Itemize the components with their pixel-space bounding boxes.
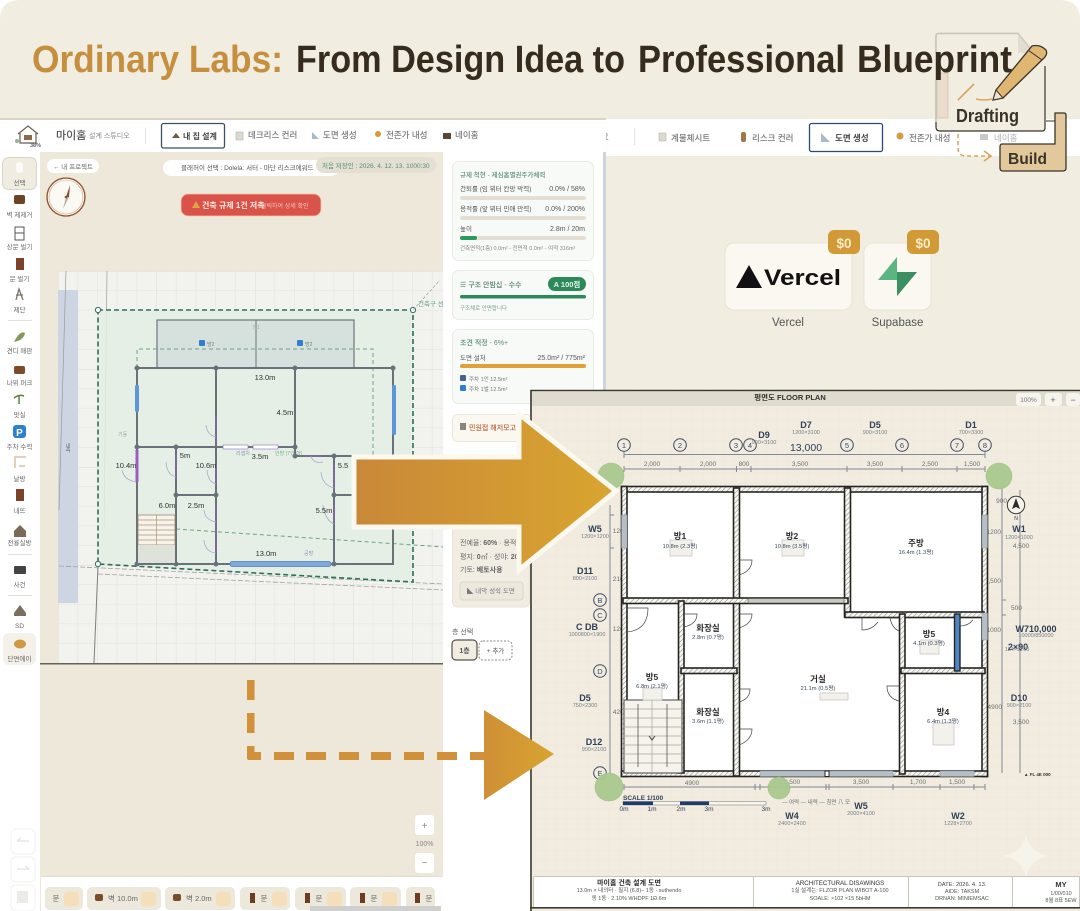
blueprint header <box>532 392 1080 406</box>
grid bubbles: 7 <box>955 441 959 450</box>
tray chip: door 2 <box>295 887 346 910</box>
title: From Design Idea to <box>296 39 625 81</box>
card: regulation: 0.0% / 200% <box>545 206 585 213</box>
card: Vercel <box>725 230 860 329</box>
icon: house logo <box>15 126 41 149</box>
opening tags: 1200 <box>987 529 1001 536</box>
card: building info: ◣ 내악 성쉭 도면 <box>467 586 515 595</box>
active tab: my house <box>162 124 224 148</box>
wall nodes <box>134 366 396 566</box>
opening tags: 10000/850000 <box>1018 633 1054 639</box>
dimension chains <box>610 442 1020 790</box>
garage block: 방2 <box>305 341 313 348</box>
floor plan windows <box>622 515 988 776</box>
panel: app top navigation: 데크리스 컨러 <box>248 130 297 140</box>
dimension labels: 10.4m <box>116 461 136 470</box>
opening tags: 4200 <box>613 709 628 716</box>
opening tags: 1228×2700 <box>944 821 972 827</box>
title block: 8월 8표 5EW <box>1045 896 1077 904</box>
opening tags: 2,500 <box>985 578 1001 585</box>
grid bubbles: C <box>597 611 603 620</box>
opening tags: 900 <box>996 498 1007 505</box>
landscaping trees <box>595 463 1012 801</box>
dimension labels: 5m <box>180 451 190 460</box>
panel: app top navigation: 마이홈 <box>56 128 86 142</box>
icon: drafting document: Drafting <box>956 106 1019 126</box>
room labels: 3.6m (1.1평) <box>692 717 724 725</box>
delete button <box>11 885 35 911</box>
title block: SOALE: ×102 ×15 5bHM <box>810 896 871 902</box>
tool: camera <box>14 566 26 589</box>
scale bar: 2m <box>676 806 686 813</box>
room labels: 방2 <box>786 531 799 541</box>
door swings <box>627 560 973 745</box>
scale bar: 1m <box>647 806 657 813</box>
icon: build tag with dashed arrow: Build <box>1008 151 1047 168</box>
card: Supabase <box>864 230 939 329</box>
scale bar: 3m <box>761 806 771 813</box>
tool: 3D: SD <box>15 623 24 630</box>
title: Ordinary Labs: <box>32 39 283 81</box>
card: regulation: 건축면적(1층) 0.0m² - 전면적 0.0m² - 여적 316m² <box>460 244 576 252</box>
dimension chains: 800 <box>739 461 750 468</box>
blueprint header: + <box>1050 395 1056 405</box>
floor plan walls <box>622 486 988 776</box>
room labels: 2.8m (0.7평) <box>692 633 724 641</box>
canvas zoom controls: 100% <box>416 841 433 848</box>
title block: 1실 설계는: FLZOR PLAN WIBOT A-100 <box>791 886 889 894</box>
opening tags: W4 <box>785 811 799 821</box>
card: regulation: 규제 척현 - 제심홈별권주가체력 <box>460 170 545 179</box>
tool: light: 날방 <box>14 474 25 483</box>
opening tags: D10 <box>1011 693 1027 703</box>
opening tags: 900×3100 <box>863 430 887 436</box>
tool: ladder <box>14 289 25 314</box>
panel: app top navigation: 도면 생성 <box>323 130 357 140</box>
stairs <box>138 515 175 563</box>
road strip: 내 <box>65 442 71 450</box>
card: Vercel: $0 <box>836 236 852 251</box>
card: conditions: 도면 설처 <box>460 353 486 362</box>
opening tags: 800×2100 <box>573 576 597 582</box>
floor selector: 층 선택 <box>452 627 473 636</box>
opening tags <box>569 420 1057 827</box>
tool: parking: P <box>16 428 23 439</box>
title block <box>530 876 1080 909</box>
card: conditions: 주차 1인 12.5m² <box>469 375 508 383</box>
title block: DRNAN: MINIEMSAC <box>935 896 989 902</box>
room labels: 6.8m (2.1평) <box>636 682 668 690</box>
card: conditions: 조견 적정 - 6%+ <box>460 338 508 347</box>
icon: north arrow: N <box>1014 516 1018 522</box>
tool: exterior (active) <box>3 633 36 665</box>
active tab: drawing generation: 도면 생성 <box>835 133 869 143</box>
grid bubbles: 6 <box>900 441 904 450</box>
tray chip: wall 2m: 벽 2.0m <box>186 893 212 903</box>
title <box>32 39 1012 81</box>
undo button <box>11 829 35 854</box>
dimension labels: 10.6m <box>196 461 216 470</box>
room labels: 10.8m (2.3평) <box>663 542 698 550</box>
site boundary dashed <box>98 310 413 582</box>
road strip <box>58 271 444 663</box>
active tab: drawing generation <box>810 124 882 152</box>
dimension chains: 3,500 <box>792 461 809 468</box>
tool: door: 문 벌기 <box>10 274 29 283</box>
title block: 마이홈 건축 설계 도면 <box>597 878 661 887</box>
tool: home settings <box>8 525 31 547</box>
panel: secondary nav bar: 계물체시트 <box>671 133 710 143</box>
opening tags: C DB <box>576 622 598 632</box>
dimension labels: 4.5m <box>277 408 293 417</box>
dimension chains: 3,500 <box>867 461 884 468</box>
panel: secondary nav bar: 네이홈 <box>994 133 1018 143</box>
grid bubbles: 5 <box>845 441 849 450</box>
card: conditions <box>452 330 594 404</box>
dimension chains: 1,500 <box>964 461 981 468</box>
tool: interior door: 내뜨 <box>14 506 25 515</box>
opening tags: D1 <box>965 420 977 430</box>
back button: ← 내 프로젝트 <box>53 162 93 171</box>
opening tags: 2×90 <box>1008 642 1028 652</box>
dimension labels: 13.0m <box>256 549 276 558</box>
opening tags: D5 <box>869 420 881 430</box>
icon: compass <box>47 178 85 216</box>
floor plan sketch on grid <box>58 271 444 663</box>
card: structure: ☰ 구조 안밤십 - 수수 <box>460 280 522 289</box>
dimension labels: 6.0m <box>159 501 175 510</box>
opening tags: 2100 <box>613 576 628 583</box>
tool: sprout: 맛실 <box>14 410 25 419</box>
opening tags: 900×2100 <box>1007 703 1031 709</box>
tool: sprout <box>14 395 25 419</box>
scale bar: 0m <box>619 806 629 813</box>
tool: select (active): 선택 <box>14 178 25 187</box>
opening tags: 500 <box>1011 605 1022 612</box>
tray chip: door 1 <box>240 887 290 910</box>
opening tags: 750×2300 <box>573 703 597 709</box>
opening tags: 700×3300 <box>959 430 983 436</box>
grid bubbles: 2 <box>678 441 682 450</box>
tray chip: wall 2m <box>165 887 235 910</box>
title block: DATE: 2026. 4. 13. <box>938 882 987 888</box>
grid bubbles: 8 <box>983 441 987 450</box>
scale bar: — 여력 — 내력 — 침면 八 모 <box>782 798 850 806</box>
tray chip: door <box>45 887 83 910</box>
title block: 1/00/010 <box>1050 891 1072 897</box>
icon: house logo: 38% <box>30 143 41 149</box>
dimension chains: 3,500 <box>853 779 870 786</box>
tool: window <box>7 227 32 251</box>
room labels: 4.1m (0.3평) <box>913 639 945 647</box>
tool: wall remove: 벽 제제거 <box>7 210 32 219</box>
opening tags: 4900 <box>988 704 1002 711</box>
canvas zoom controls <box>415 815 434 873</box>
tool: window: 상문 벌기 <box>7 242 32 251</box>
opening tags: D11 <box>577 566 593 576</box>
icon: build tag with dashed arrow <box>958 113 1066 171</box>
saved-time pill: 처음 저장인 : 2026. 4. 12. 13. 1000:30 <box>322 161 430 170</box>
title block: 13.0m × 내의터 · 필지 (6.8)– 1동 · suthendo <box>577 886 681 894</box>
garage block: 방2 <box>207 341 215 348</box>
panel: design canvas <box>41 152 443 876</box>
tray chip: door 1: 문 <box>261 894 268 903</box>
blueprint header: 100% <box>1020 397 1037 404</box>
scale bar: 3m <box>704 806 714 813</box>
garage block <box>157 320 354 368</box>
tool: wall remove <box>7 195 32 219</box>
card: building info: 전예율: 60% · 용적 <box>460 538 516 547</box>
tool: wood <box>7 366 32 387</box>
opening tags: D5 <box>579 693 591 703</box>
tool: home settings: 전룡실방 <box>8 538 31 547</box>
floor selector <box>452 627 512 660</box>
alert badge: 클릭하여 상세 확인 <box>261 202 308 210</box>
dimension chains: 2,000 <box>644 461 661 468</box>
scale bar <box>619 795 850 813</box>
opening tags: 1000 <box>987 627 1001 634</box>
tray chip: door 4 <box>406 887 435 910</box>
room labels: 10.8m (3.5평) <box>775 542 810 550</box>
card: conditions: 25.0m² / 775m² <box>538 355 586 362</box>
card: building info: 기토: 베토사용 <box>460 565 503 574</box>
floor plan interior <box>624 489 985 774</box>
opening tags: ▲ FL 4E 000 <box>1024 772 1051 777</box>
opening tags: 3,500 <box>1013 719 1030 726</box>
panel: secondary nav bar <box>600 119 1080 156</box>
dimension labels: 5.5 <box>338 461 348 470</box>
opening tags: 1000800×1900 <box>569 632 605 638</box>
tool: camera: 사건 <box>14 580 25 589</box>
panel: left tool sidebar <box>0 152 41 911</box>
panel: app top navigation <box>0 118 606 152</box>
room labels: 화장실 <box>696 707 720 717</box>
road strip: 측 <box>65 446 71 454</box>
title: Professional <box>638 39 845 81</box>
opening tags: 2400×2400 <box>778 821 806 827</box>
card: regulation: 건퇴률 (임 뷔터 칸망 막력) <box>460 184 531 193</box>
card: structure: 구조체로 안면합니다 <box>460 304 507 312</box>
room labels <box>636 531 959 745</box>
tray chip: wall 10m: 벽 10.0m <box>108 893 138 903</box>
canvas zoom controls: − <box>422 858 428 869</box>
dimension labels: 2.5m <box>188 501 204 510</box>
tray chip: door 3 <box>350 887 401 910</box>
title block: MY <box>1055 880 1067 889</box>
card: Vercel: Vercel <box>772 317 804 329</box>
panel: bottom object tray <box>41 876 443 911</box>
card: structure <box>452 270 594 320</box>
panel: app top navigation: 전존가 내성 <box>386 130 427 140</box>
opening tags: 134×1200 <box>1005 647 1029 653</box>
tool: parking <box>7 425 32 451</box>
tool: 3D <box>14 605 26 630</box>
dimension labels: 기둥 <box>118 431 128 438</box>
opening tags: W710,000 <box>1015 624 1057 634</box>
room labels: 화장실 <box>696 623 720 633</box>
floor plan sketch on grid: 건축구 선 <box>418 299 444 308</box>
tool: light <box>14 457 26 483</box>
dimension labels <box>116 373 348 558</box>
panel: secondary nav bar: 전존가 내성 <box>909 133 950 143</box>
opening tags: 1200×1200 <box>581 534 609 540</box>
opening tags: W1 <box>1012 524 1026 534</box>
room labels: 방1 <box>674 531 687 541</box>
icon: north arrow <box>1007 496 1025 522</box>
tool: select (active) <box>2 158 36 190</box>
opening tags: 1200 <box>613 626 628 633</box>
selected-plot pill <box>163 160 339 176</box>
card: building info: 평지: 0㎡ · 성야: 20 <box>460 552 519 561</box>
card: regulation: 2.8m / 20m <box>550 226 585 233</box>
card: structure: A 100점 <box>554 279 580 289</box>
blueprint header: 평면도 FLOOR PLAN <box>754 392 826 402</box>
tool: door <box>10 258 29 283</box>
tool: parking: 주차 수력 <box>7 442 32 451</box>
garage block: 7.1 <box>252 325 260 331</box>
blueprint header: − <box>1070 395 1076 405</box>
title block: ARCHITECTURAL DISAWINGS <box>796 880 884 887</box>
opening tags: 1200×3100 <box>792 430 820 436</box>
opening tags: D7 <box>800 420 812 430</box>
opening tags: D12 <box>586 737 602 747</box>
tray chip: door 2: 문 <box>316 894 323 903</box>
card: regulation: 용적률 (앞 뷔터 민애 만력) <box>460 204 531 213</box>
tool: ladder: 제단 <box>14 305 25 314</box>
grid bubbles: 4 <box>748 441 752 450</box>
tray chip: door: 문 <box>53 894 60 903</box>
selected-plot pill: 클래허이 선택 : Dolela: 서터 - 마단 리스크에워드 <box>181 163 314 172</box>
saved-time pill <box>316 157 436 173</box>
tool: plant <box>7 332 32 355</box>
card: regulation: 높이 <box>460 224 472 233</box>
alert badge <box>181 194 321 216</box>
opening tags: W5 <box>854 801 868 811</box>
room labels: 주방 <box>908 538 924 548</box>
opening tags: 1200 <box>613 528 628 535</box>
dimension labels: 5.5m <box>316 506 332 515</box>
card: building info <box>452 525 530 607</box>
opening tags: 4,500 <box>1013 543 1030 550</box>
dimension chains: 2,000 <box>700 461 717 468</box>
dimension labels: 13.0m <box>255 373 275 382</box>
scale bar: SCALE 1/100 <box>623 795 663 802</box>
tool: interior door <box>14 489 25 515</box>
opening tags: D9 <box>758 430 770 440</box>
opening tags: 1200×1000 <box>1005 535 1033 541</box>
opening tags: 900×2100 <box>582 747 606 753</box>
card: Vercel: Vercel <box>764 265 841 290</box>
building site area <box>98 310 413 583</box>
redo button <box>11 857 35 882</box>
opening tags: W2 <box>951 811 965 821</box>
stairs <box>624 700 682 773</box>
dimension chains: 13,000 <box>790 442 822 454</box>
sparkle <box>1003 834 1049 878</box>
tray chip: wall 10m <box>87 887 161 910</box>
card: warning <box>452 414 532 442</box>
tool: plant: 견디 매판 <box>7 346 32 355</box>
tool: exterior (active): 단면에이 <box>8 654 31 663</box>
panel: blueprint sheet <box>530 390 1080 911</box>
back button <box>47 159 99 173</box>
dimension chains: 1,500 <box>949 779 966 786</box>
opening tags: 900×3100 <box>752 440 776 446</box>
room labels: 거실 <box>810 674 826 684</box>
grid bubbles: B <box>597 596 603 605</box>
grid bubbles: 1 <box>622 441 626 450</box>
dimension chains: 1,700 <box>910 779 927 786</box>
grid bubbles: E <box>597 769 603 778</box>
card: Supabase: $0 <box>915 236 931 251</box>
floor selector: 1층 <box>459 646 470 655</box>
panel: right status sidebar <box>443 152 606 911</box>
room labels: 21.1m (0.5평) <box>801 684 836 692</box>
room labels: 방4 <box>937 707 950 717</box>
rounded page corners <box>0 0 1080 20</box>
walls <box>137 368 393 564</box>
tray chip: door 3: 문 <box>371 894 378 903</box>
panel: app top navigation: 설계 스튜디오 <box>89 131 130 140</box>
room labels: 방5 <box>646 672 659 682</box>
big arrow: sketch to blueprint <box>354 414 616 570</box>
icon: drafting document <box>936 34 1045 131</box>
floor selector: + 추가 <box>487 646 504 655</box>
room labels: 방5 <box>923 629 936 639</box>
card: conditions: 주차 1벌 12.5m² <box>469 385 508 393</box>
card: regulation: 0.0% / 58% <box>549 186 585 193</box>
panel: app top navigation: 네이홈 <box>455 130 479 140</box>
grid bubbles: 3 <box>734 441 738 450</box>
opening tags: 2000×4100 <box>847 811 875 817</box>
doors <box>176 416 334 554</box>
canvas zoom controls: + <box>422 821 428 832</box>
dimension chains: 2,500 <box>784 779 801 786</box>
card: Supabase: Supabase <box>872 317 923 329</box>
title block: 동 1동 · 2.10% WHDPF 1Ð.6m <box>592 895 667 902</box>
card: regulation <box>452 162 594 260</box>
grid bubbles <box>594 439 991 779</box>
active tab: my house: 내 집 설계 <box>183 131 217 141</box>
room labels: 6.4m (1.3평) <box>927 717 959 725</box>
dimension chains: 2,500 <box>922 461 939 468</box>
title: Blueprint <box>857 39 1012 81</box>
dimension labels: 3.5m <box>252 452 268 461</box>
alert badge: 건축 규제 1건 저촉 <box>202 200 265 210</box>
windows <box>135 385 396 566</box>
dimension chains: 4900 <box>685 780 700 787</box>
panel: secondary nav bar: 요 <box>600 132 609 143</box>
room labels: 16.4m (1.3평) <box>899 548 934 556</box>
opening tags: W5 <box>588 524 602 534</box>
title block: AIDE: TAKSM <box>945 889 980 895</box>
panel: free hosting services <box>725 230 939 329</box>
dimension labels: 리셉치 <box>236 450 250 457</box>
icon: pencil <box>993 46 1047 100</box>
panel: secondary nav bar: 리스크 컨러 <box>752 133 793 143</box>
tool: wood: 나뮈 퍼크 <box>7 378 32 387</box>
dashed arrow: sketch to blueprint <box>247 680 554 800</box>
floor divider line <box>40 663 444 664</box>
dimension labels: 공방 <box>304 550 314 557</box>
dimension labels: 안방 (7인 학) <box>275 450 303 457</box>
tray chip: door 4: 문 <box>426 894 433 903</box>
card: warning: 민원접 해저모고 <box>469 423 517 432</box>
grid bubbles: D <box>597 667 603 676</box>
